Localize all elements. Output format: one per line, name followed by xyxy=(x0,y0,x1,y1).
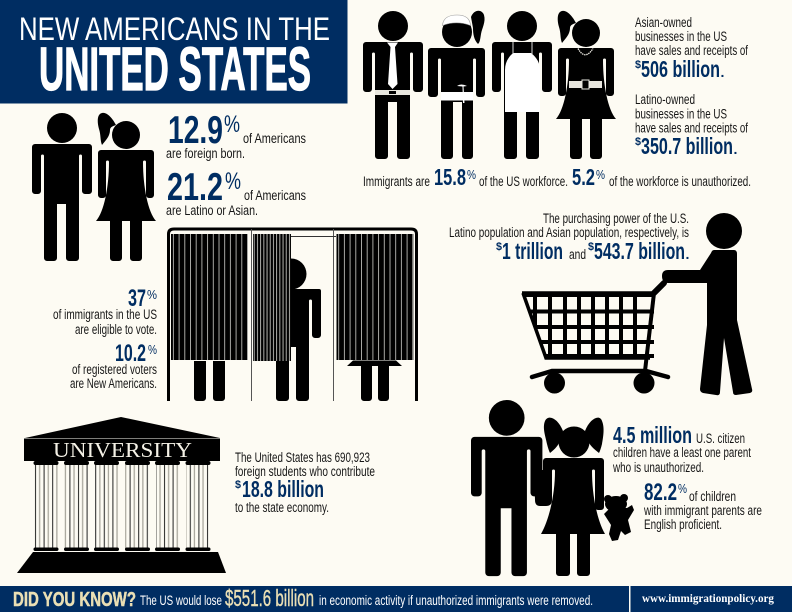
stat: registered voters xyxy=(70,340,157,391)
stat: registered voters: % xyxy=(148,342,157,357)
text: Latino-owned businesses: 350.7 billion xyxy=(641,133,733,159)
stat: eligible to vote: 37 xyxy=(128,285,146,312)
text: Asian-owned businesses: have sales and receipts of xyxy=(635,43,748,58)
footer: did you know: The US would lose xyxy=(140,593,222,608)
stat: foreign born: 12.9 xyxy=(168,109,223,152)
text: Latino-owned businesses: $ xyxy=(635,136,641,148)
text: foreign students: 18.8 billion xyxy=(242,476,324,502)
icon: voting booth xyxy=(168,229,416,401)
text: purchasing power xyxy=(449,211,689,264)
title banner xyxy=(0,0,348,104)
stat: Latino or Asian: 21.2 xyxy=(167,166,223,209)
footer: did you know xyxy=(0,585,629,612)
text: Asian-owned businesses xyxy=(635,15,748,82)
text: foreign students: to the state economy. xyxy=(235,500,329,515)
text: Asian-owned businesses: . xyxy=(720,64,724,80)
text: workforce statistics: Immigrants are xyxy=(363,174,430,189)
parent xyxy=(471,400,542,576)
text: workforce statistics: 15.8 xyxy=(434,164,466,190)
stat: citizen children: U.S. citizen xyxy=(696,431,745,446)
teddy bear xyxy=(604,494,634,541)
stat: English proficient: % xyxy=(678,481,687,496)
stat: citizen children xyxy=(612,422,751,475)
stat: foreign born: % xyxy=(224,111,240,138)
stat: registered voters: of registered voters xyxy=(72,362,157,377)
stat: English proficient: of children xyxy=(689,489,736,504)
text: purchasing power: 543.7 billion xyxy=(594,238,685,264)
pediment xyxy=(25,417,220,438)
stat: foreign born xyxy=(166,109,306,161)
stat: citizen children: who is unauthorized. xyxy=(612,460,704,475)
stat: Latino or Asian xyxy=(166,166,306,218)
text: purchasing power: $ xyxy=(588,241,594,253)
stat: English proficient xyxy=(643,479,762,532)
stat: registered voters: are New Americans. xyxy=(70,376,157,391)
stat: Latino or Asian: of Americans xyxy=(244,188,306,203)
stat: foreign born: are foreign born. xyxy=(166,146,245,161)
text: purchasing power: Latino population and Asian population, respectively, is xyxy=(449,225,689,240)
stat: registered voters: 10.2 xyxy=(115,340,146,367)
stat: English proficient: English proficient. xyxy=(644,517,722,532)
footer: website: www.immigrationpolicy.org xyxy=(642,591,774,605)
joined hands xyxy=(534,470,552,506)
text: purchasing power: . xyxy=(686,246,689,262)
curtain right xyxy=(336,234,414,360)
text: workforce statistics: 5.2 xyxy=(572,164,595,190)
footer: did you know: DID YOU KNOW? xyxy=(13,589,136,611)
text: foreign students: The United States has 690,923 xyxy=(235,450,370,465)
text: workforce statistics: % xyxy=(596,167,605,182)
text: Asian-owned businesses: Asian-owned xyxy=(635,15,692,30)
footer: did you know: $551.6 billion xyxy=(225,585,314,611)
text: foreign students: foreign students who contribute xyxy=(235,464,375,479)
columns xyxy=(34,464,210,549)
footer: did you know: in economic activity if unauthorized immigrants were removed. xyxy=(319,593,593,608)
text: purchasing power: 1 trillion xyxy=(502,238,563,264)
curtain left xyxy=(171,234,248,360)
text: Asian-owned businesses: 506 billion xyxy=(641,56,720,82)
legs under left curtain xyxy=(194,361,225,401)
text: foreign students: $ xyxy=(235,479,241,491)
worker: man with apron xyxy=(492,11,552,159)
text: workforce statistics xyxy=(363,164,751,190)
steps xyxy=(17,552,226,573)
stat: Latino or Asian: are Latino or Asian. xyxy=(166,203,258,218)
text: foreign students xyxy=(235,450,375,515)
icon: shopping cart xyxy=(522,283,668,394)
curtain middle xyxy=(253,234,291,361)
text: Asian-owned businesses: $ xyxy=(635,59,641,71)
stat: citizen children: 4.5 million xyxy=(613,422,692,448)
text: Latino-owned businesses xyxy=(635,92,748,159)
text: purchasing power: The purchasing power of the U.S. xyxy=(543,211,689,226)
icon: parent and child with teddy bear xyxy=(471,400,634,576)
university label: UNIVERSITY xyxy=(53,438,192,462)
text: Latino-owned businesses: have sales and receipts of xyxy=(635,120,748,136)
stat: Latino or Asian: % xyxy=(225,168,241,195)
voter behind curtain xyxy=(276,258,321,401)
worker: woman with necklace and belt xyxy=(556,11,616,159)
stat: eligible to vote: are eligible to vote. xyxy=(75,322,157,337)
icon: shopper xyxy=(662,213,752,395)
text: Latino-owned businesses: Latino-owned xyxy=(635,92,695,107)
child xyxy=(541,418,605,576)
stat: eligible to vote: % xyxy=(147,287,157,302)
title banner: UNITED STATES xyxy=(39,35,311,103)
stat: eligible to vote xyxy=(53,285,157,337)
footer: website xyxy=(630,586,792,612)
icon: workers xyxy=(363,11,616,159)
text: workforce statistics: of the US workforce. xyxy=(479,174,568,189)
stat: foreign born: of Americans xyxy=(243,131,306,146)
title banner: NEW AMERICANS IN THE xyxy=(19,11,330,47)
worker: businessman with tie xyxy=(363,11,423,159)
text: Latino-owned businesses: businesses in the US xyxy=(635,106,727,122)
text: purchasing power: $ xyxy=(496,241,502,253)
stat: English proficient: 82.2 xyxy=(644,479,677,506)
legs under right curtain xyxy=(347,360,402,401)
entablature xyxy=(24,438,220,461)
text: workforce statistics: % xyxy=(467,167,476,182)
text: purchasing power: and xyxy=(569,247,586,262)
worker: woman with hard hat and tool belt xyxy=(428,11,485,159)
icon: university building xyxy=(17,417,226,573)
text: Latino-owned businesses: . xyxy=(734,141,737,157)
icon: man and woman xyxy=(32,113,156,261)
stat: eligible to vote: of immigrants in the US xyxy=(53,307,157,322)
column capitals and bases xyxy=(34,461,210,551)
text: Asian-owned businesses: businesses in the US xyxy=(635,29,727,44)
